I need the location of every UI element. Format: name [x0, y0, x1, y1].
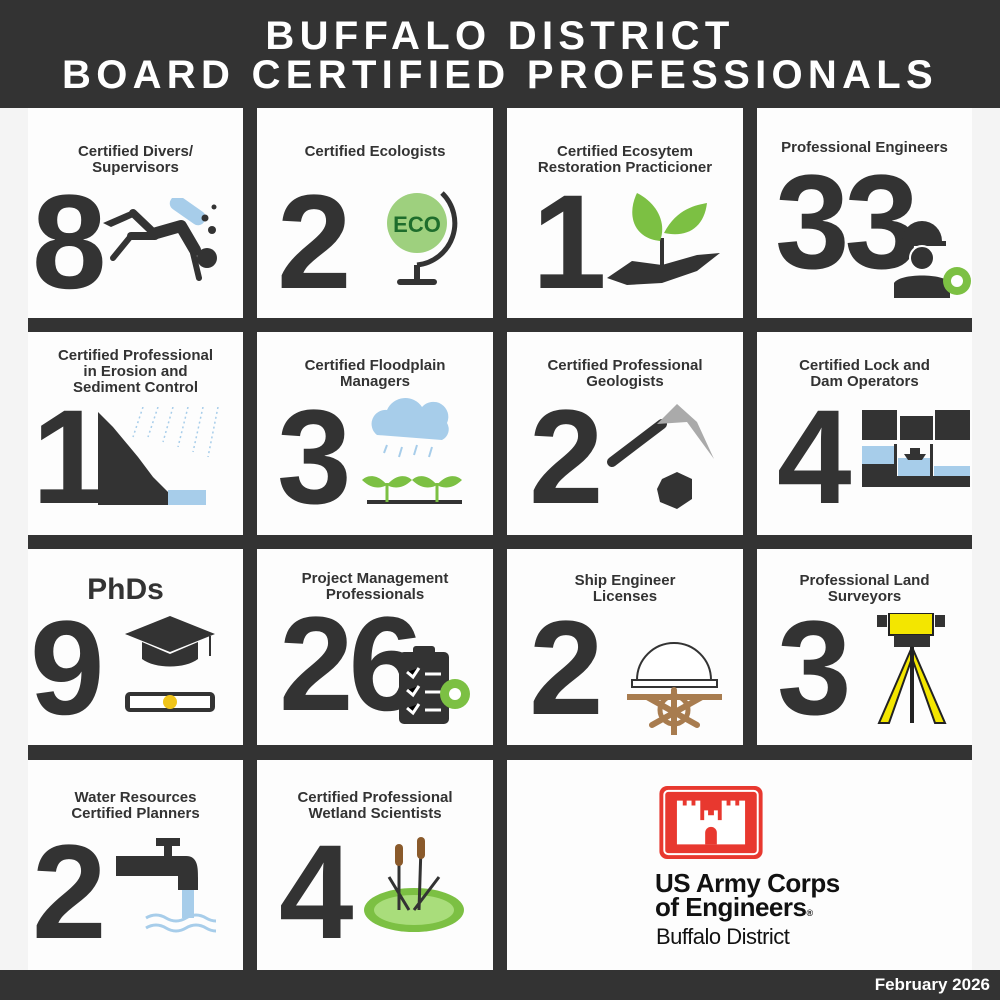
panel: project management — [257, 549, 493, 745]
panel: geologists: Certified Professional — [547, 357, 703, 374]
logo text: US Army Corps — [655, 868, 840, 898]
panel: ecologists: 2 — [277, 168, 347, 317]
panel: ecologists — [257, 108, 493, 318]
icon: faucet and water — [116, 838, 216, 932]
panel: land surveyors: Professional Land — [799, 572, 930, 589]
panel: water resources planners — [28, 760, 243, 970]
date: February 2026 — [875, 975, 990, 994]
panel: erosion — [28, 332, 243, 535]
title — [62, 14, 938, 97]
icon: clipboard with gear — [399, 646, 470, 724]
icon: eco globe: ECO — [393, 212, 441, 237]
icon: hard hat and ship wheel — [627, 642, 722, 735]
panel: floodplain: Certified Floodplain — [305, 357, 445, 374]
panel: ecosystem restoration: 1 — [532, 168, 602, 317]
icon: lock chamber — [862, 410, 970, 487]
panel: land surveyors: 3 — [777, 594, 847, 743]
panel: divers: Certified Divers/ — [78, 143, 193, 160]
panel: erosion: Sediment Control — [73, 379, 198, 396]
logo text — [655, 868, 840, 922]
panel: ecosystem restoration: Certified Ecosytem — [557, 143, 693, 160]
panel: water resources planners: Water Resources — [74, 789, 196, 806]
panel: geologists — [507, 332, 743, 535]
icon: hand with sprout — [607, 193, 720, 285]
panel: geologists: Geologists — [586, 373, 664, 390]
panel: divers — [28, 108, 243, 318]
panel: ship engineer: Ship Engineer — [575, 572, 675, 589]
panel: divers: Supervisors — [92, 159, 179, 176]
icon: grad cap and diploma — [125, 616, 215, 712]
panel: lock and dam: 4 — [777, 383, 847, 532]
panel: project management: Professionals — [326, 586, 424, 603]
panel: professional engineers: Professional Engineers — [781, 139, 948, 156]
panel: PhDs — [28, 549, 243, 745]
panel: ship engineer: Licenses — [593, 588, 657, 605]
title: BOARD CERTIFIED PROFESSIONALS — [62, 53, 938, 97]
icon: rock hammer — [607, 404, 714, 509]
panel: wetland scientists: Certified Professional — [297, 789, 453, 806]
panel: erosion: Certified Professional — [58, 347, 213, 364]
panel: wetland scientists: 4 — [279, 818, 349, 967]
panel: water resources planners: 2 — [32, 818, 102, 967]
panel: floodplain: Managers — [340, 373, 410, 390]
panel: land surveyors: Surveyors — [828, 588, 901, 605]
panel: lock and dam: Certified Lock and — [799, 357, 930, 374]
panel: project management: Project Management — [302, 570, 448, 587]
icon: cattails in pond — [364, 837, 464, 932]
panel: divers: 8 — [32, 168, 102, 317]
title: BUFFALO DISTRICT — [265, 14, 735, 58]
panel: lock and dam — [757, 332, 972, 535]
icon: diver — [103, 198, 217, 281]
panel: geologists: 2 — [529, 383, 599, 532]
panel: ecologists: Certified Ecologists — [305, 143, 445, 160]
panel: wetland scientists: Wetland Scientists — [308, 805, 442, 822]
panel: professional engineers: 33 — [775, 148, 914, 297]
logo text: of Engineers® — [655, 892, 813, 922]
panel: ecosystem restoration — [507, 108, 743, 318]
icon: eroding slope — [98, 407, 219, 505]
panel: ship engineer: 2 — [529, 594, 599, 743]
panel: USACE logo — [507, 760, 972, 970]
panel: land surveyors — [757, 549, 972, 745]
icon: surveyor tripod — [877, 613, 946, 724]
panel: floodplain — [257, 332, 493, 535]
panel: erosion: 1 — [32, 383, 102, 532]
panel: wetland scientists — [257, 760, 493, 970]
icon: eco globe — [387, 191, 458, 285]
panel: USACE logo: Buffalo District — [656, 924, 789, 949]
panel: PhDs: 9 — [30, 594, 100, 743]
panel: project management: 26 — [279, 590, 418, 739]
icon: castle logo — [659, 786, 763, 859]
header — [0, 0, 1000, 108]
panel: professional engineers — [757, 108, 972, 318]
panel: lock and dam: Dam Operators — [810, 373, 919, 390]
panel: ship engineer — [507, 549, 743, 745]
footer — [0, 970, 1000, 1000]
panel: floodplain: 3 — [277, 383, 347, 532]
panel: water resources planners: Certified Planners — [71, 805, 200, 822]
panel: PhDs: PhDs — [87, 573, 164, 606]
panel: erosion: in Erosion and — [83, 363, 188, 380]
icon: engineer with gear — [894, 221, 971, 298]
icon: rain cloud and plants — [362, 398, 462, 504]
panel: ecosystem restoration: Restoration Practicioner — [538, 159, 712, 176]
